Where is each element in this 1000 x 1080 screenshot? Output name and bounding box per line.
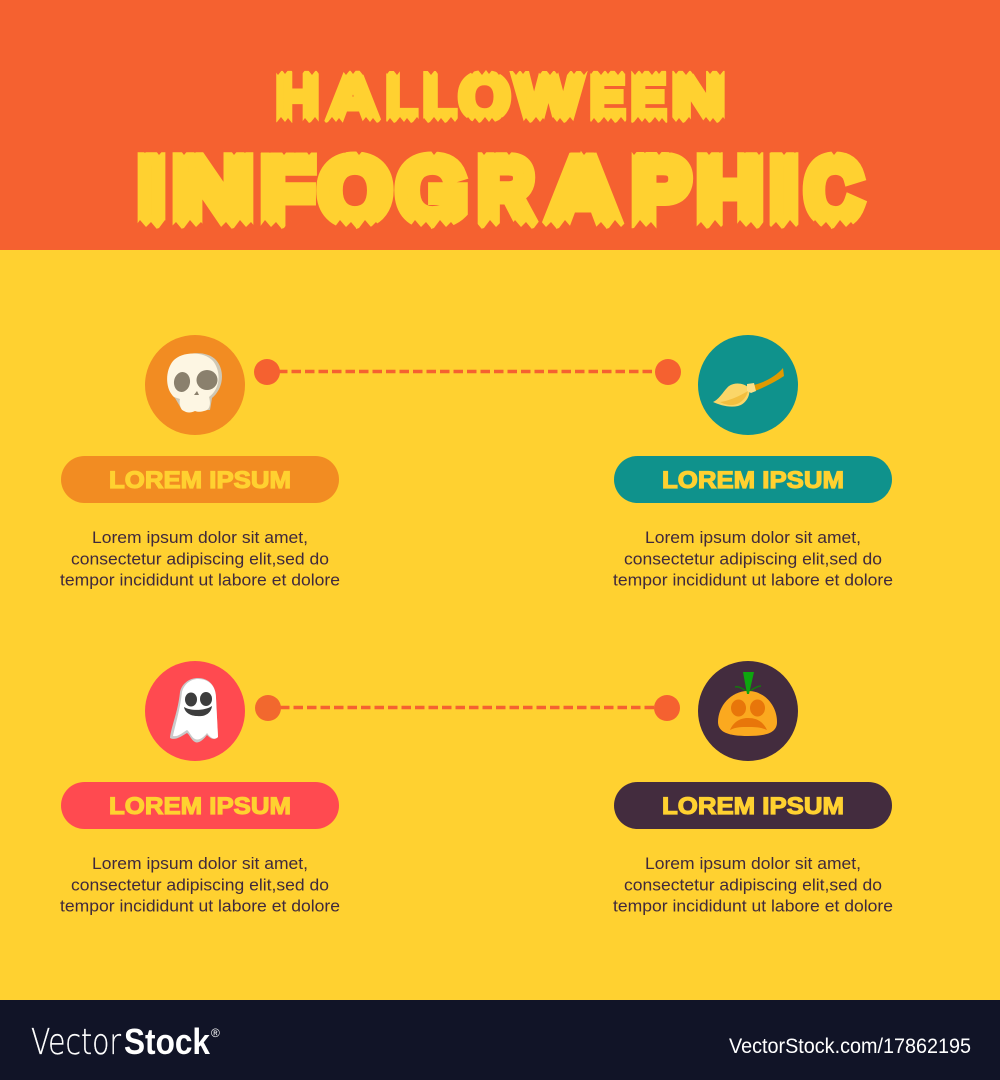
- title: Halloween: E: [590, 61, 625, 133]
- title: Infographic: A: [547, 140, 619, 242]
- text block: broom: Lorem ipsum dolor sit amet,: [645, 528, 861, 547]
- text block: skull: consectetur adipiscing elit,sed do: [71, 550, 329, 568]
- text block: pumpkin: Lorem ipsum dolor sit amet,: [645, 854, 861, 873]
- footer logo: Stock: [124, 1021, 211, 1062]
- panel: pumpkin: [613, 661, 893, 916]
- label pill: broom: LOREM IPSUM: [662, 467, 844, 494]
- label pill: ghost: LOREM IPSUM: [109, 793, 291, 820]
- text block: ghost: consectetur adipiscing elit,sed do: [71, 876, 329, 894]
- title: Halloween: L: [423, 61, 456, 133]
- footer id: VectorStock.com/17862195: [729, 1035, 971, 1058]
- header banner: [0, 0, 1000, 250]
- text block: pumpkin: tempor incididunt ut labore et dolore: [613, 896, 893, 916]
- title: Infographic: F: [261, 140, 314, 242]
- title: Halloween: W: [515, 61, 583, 133]
- footer logo: ®: [211, 1026, 220, 1040]
- title: Infographic: O: [319, 140, 391, 242]
- label pill: skull: LOREM IPSUM: [109, 467, 291, 494]
- connector: ghost to pumpkin: [255, 695, 680, 721]
- footer bar: [0, 1000, 1000, 1080]
- panel: skull: [60, 335, 681, 590]
- icon: ghost: [145, 661, 245, 761]
- title: Infographic: G: [397, 140, 467, 242]
- title: Halloween: N: [672, 61, 725, 133]
- title: Infographic: R: [478, 140, 534, 242]
- title: Infographic: I: [138, 140, 165, 242]
- label pill: broom: [614, 456, 892, 503]
- label pill: ghost: [61, 782, 339, 829]
- text block: ghost: Lorem ipsum dolor sit amet,: [92, 854, 308, 873]
- text block: skull: tempor incididunt ut labore et dolore: [60, 570, 340, 590]
- title: Halloween: H: [276, 61, 319, 133]
- icon: broom: [698, 335, 798, 435]
- title: Infographic: C: [805, 140, 862, 242]
- text block: broom: tempor incididunt ut labore et dolore: [613, 570, 893, 590]
- text block: broom: consectetur adipiscing elit,sed do: [624, 550, 882, 568]
- label pill: pumpkin: LOREM IPSUM: [662, 793, 844, 820]
- panel: broom: [613, 335, 893, 590]
- title: Infographic: N: [173, 140, 253, 242]
- icon: pumpkin: [698, 661, 798, 761]
- label pill: pumpkin: [614, 782, 892, 829]
- title: Halloween: L: [386, 61, 417, 133]
- title: Infographic: I: [770, 140, 798, 242]
- title: Infographic: H: [697, 140, 763, 242]
- title: Halloween: E: [631, 61, 666, 133]
- title: Halloween: O: [459, 61, 510, 133]
- footer logo: Vector: [31, 1022, 121, 1063]
- icon: skull: [145, 335, 245, 435]
- label pill: skull: [61, 456, 339, 503]
- panel: ghost: [60, 661, 680, 916]
- text block: ghost: tempor incididunt ut labore et dolore: [60, 896, 340, 916]
- title: Halloween: A: [328, 61, 378, 133]
- text block: pumpkin: consectetur adipiscing elit,sed do: [624, 876, 882, 894]
- text block: skull: Lorem ipsum dolor sit amet,: [92, 528, 308, 547]
- title: Infographic: P: [632, 140, 690, 242]
- connector: skull to broom: [254, 359, 681, 385]
